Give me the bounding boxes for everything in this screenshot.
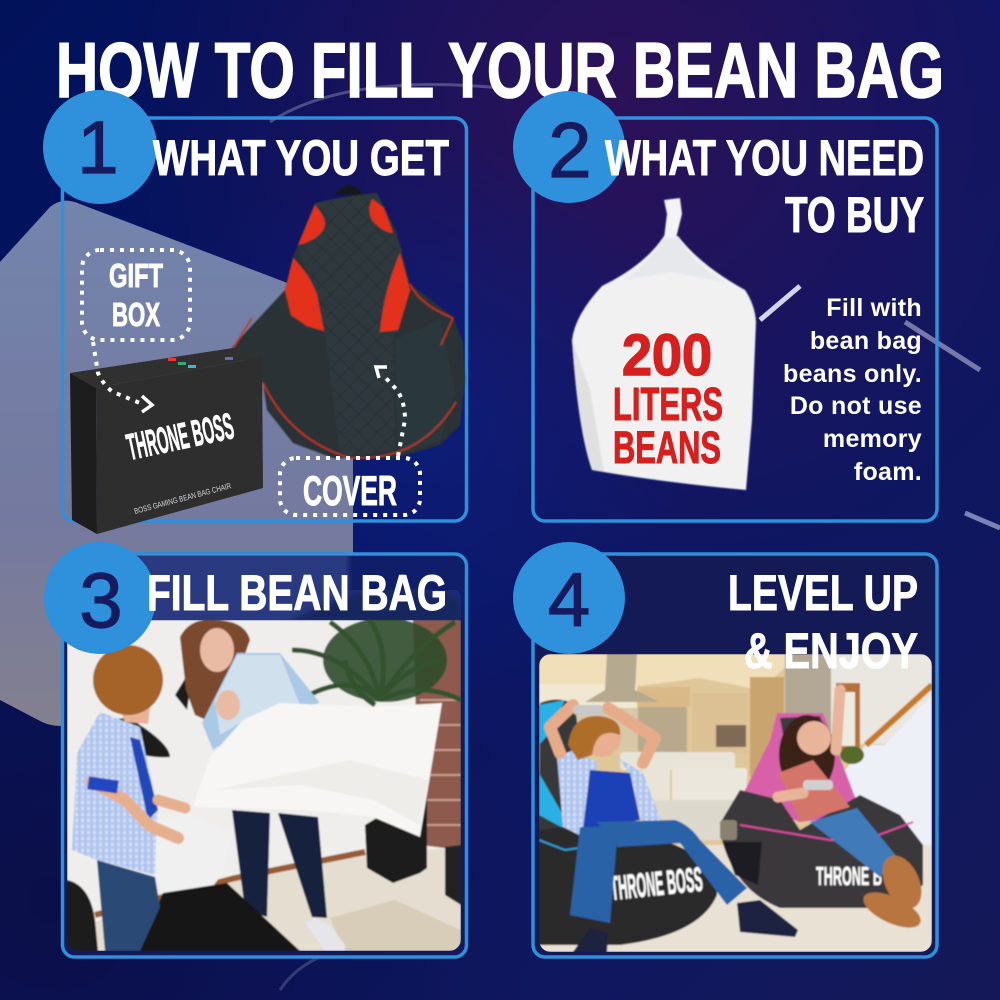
number badge 3: 3 xyxy=(79,556,123,644)
label: gift box: BOX xyxy=(112,296,160,333)
instructions text: foam. xyxy=(854,458,922,486)
heading xyxy=(605,130,924,243)
bag text: 200 liters beans xyxy=(613,323,723,473)
instructions text xyxy=(783,294,922,486)
panel 1: what you get xyxy=(43,90,466,534)
instructions text: memory xyxy=(823,425,922,453)
heading xyxy=(728,565,918,679)
number badge 1: 1 xyxy=(77,106,119,189)
gift box: THRONE BOSS xyxy=(123,405,237,468)
number badge 4: 4 xyxy=(548,558,590,643)
panel 4: level up and enjoy xyxy=(513,542,937,957)
heading: TO BUY xyxy=(785,187,924,243)
bag text: 200 liters beans: BEANS xyxy=(613,422,721,473)
number badge 2 xyxy=(513,91,625,203)
gift box xyxy=(70,348,263,534)
panel 3: fill bean bag xyxy=(44,542,466,957)
instructions text: beans only. xyxy=(783,360,922,388)
panel background xyxy=(62,554,466,957)
heading: LEVEL UP xyxy=(728,565,918,621)
blurred plant behind heading xyxy=(292,590,461,620)
photo: kids on bean bags: THRONE B xyxy=(816,861,882,891)
panel border xyxy=(62,554,466,957)
heading: WHAT YOU GET xyxy=(153,130,449,186)
number badge 1 xyxy=(43,90,157,204)
bag of beans xyxy=(572,198,756,490)
arrow: cover label to bag xyxy=(376,367,405,456)
bag text: 200 liters beans: 200 xyxy=(622,323,712,388)
bean bag cover xyxy=(232,186,465,458)
bag text: 200 liters beans: LITERS xyxy=(613,378,723,430)
photo: boy and woman filling bag xyxy=(67,618,461,951)
instructions text: Fill with xyxy=(826,294,922,322)
panel 2: what you need to buy xyxy=(513,91,937,521)
label: cover: COVER xyxy=(303,467,397,514)
instructions text: bean bag xyxy=(810,327,922,355)
number badge 3 xyxy=(44,542,156,654)
label: gift box: GIFT xyxy=(109,257,163,294)
heading: & ENJOY xyxy=(744,623,918,679)
label: cover xyxy=(280,458,420,515)
instructions text: Do not use xyxy=(790,392,922,420)
photo: kids on bean bags: THRONE BOSS xyxy=(609,861,704,908)
panel background xyxy=(533,554,937,957)
box caption: BOSS GAMING BEAN BAG CHAIR xyxy=(133,481,232,516)
photo: kids on bean bags xyxy=(539,654,932,952)
number badge 4 xyxy=(513,542,625,654)
heading: FILL BEAN BAG xyxy=(147,565,447,621)
arrow: gift label to box xyxy=(93,342,152,412)
number badge 2: 2 xyxy=(548,106,592,194)
label: gift box xyxy=(82,250,190,340)
panel border xyxy=(533,554,937,957)
translucent hexagon background shape xyxy=(0,201,353,726)
